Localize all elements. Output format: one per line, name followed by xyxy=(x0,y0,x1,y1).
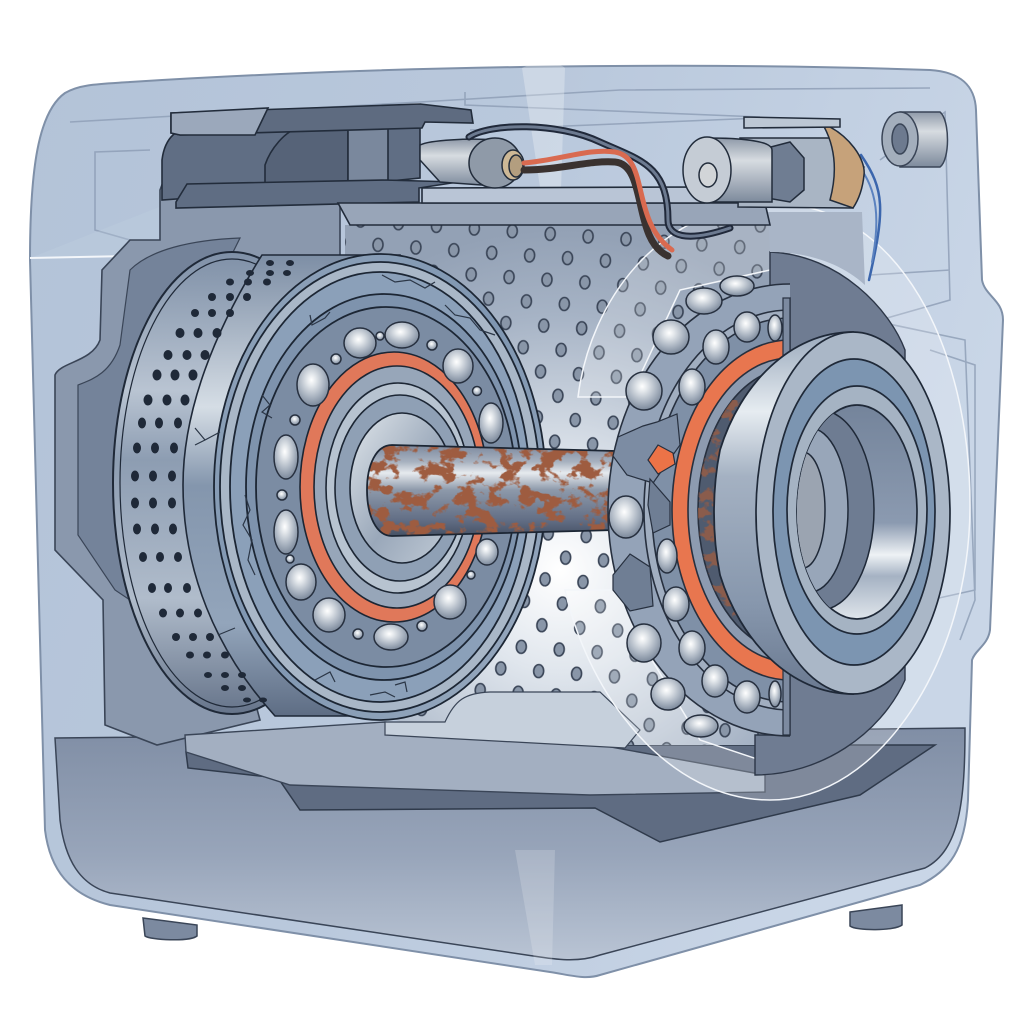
right bearing balls xyxy=(609,276,782,737)
shell inner contour lines xyxy=(70,88,975,640)
right bearing cutaway races xyxy=(607,283,790,737)
tray glare stripe xyxy=(515,850,555,965)
shattered bearing fragments xyxy=(613,414,680,611)
lid seam xyxy=(30,104,420,258)
dark housing behind right bearing xyxy=(755,252,905,775)
corroded drive shaft xyxy=(368,446,614,536)
drum perforations xyxy=(131,260,294,702)
shaft outline xyxy=(367,445,616,536)
front bearing bore interior xyxy=(797,413,875,608)
left motor connector xyxy=(420,138,524,188)
foot right xyxy=(850,905,902,930)
left bearing housing rings xyxy=(214,254,546,720)
shell glare stripe xyxy=(522,64,565,220)
corrosion cracks on left bearing xyxy=(195,275,495,697)
small cylinder top right xyxy=(882,112,948,167)
floor plate xyxy=(185,722,765,795)
wire bundle xyxy=(469,127,880,280)
light slab under drum xyxy=(385,692,640,748)
perforated inner drum cone xyxy=(340,220,800,750)
right motor assembly xyxy=(683,117,864,208)
rust inside right bearing xyxy=(698,400,740,617)
foot left xyxy=(143,918,197,940)
front bearing outer cylinder xyxy=(714,332,853,694)
bottom tray xyxy=(55,728,965,960)
perforated drum shell xyxy=(113,252,400,716)
left frame bracket xyxy=(55,150,340,745)
left frame inner shadow xyxy=(78,238,240,600)
plate edge strip xyxy=(783,298,790,735)
left bearing orange seal and hub xyxy=(300,352,488,622)
tray inner shadow recess xyxy=(186,745,935,842)
translucent guard disc xyxy=(565,204,970,800)
left bearing balls xyxy=(274,322,503,650)
upper mounting block xyxy=(162,104,770,225)
front bearing rings xyxy=(756,332,950,694)
upper housing panel xyxy=(768,212,865,285)
